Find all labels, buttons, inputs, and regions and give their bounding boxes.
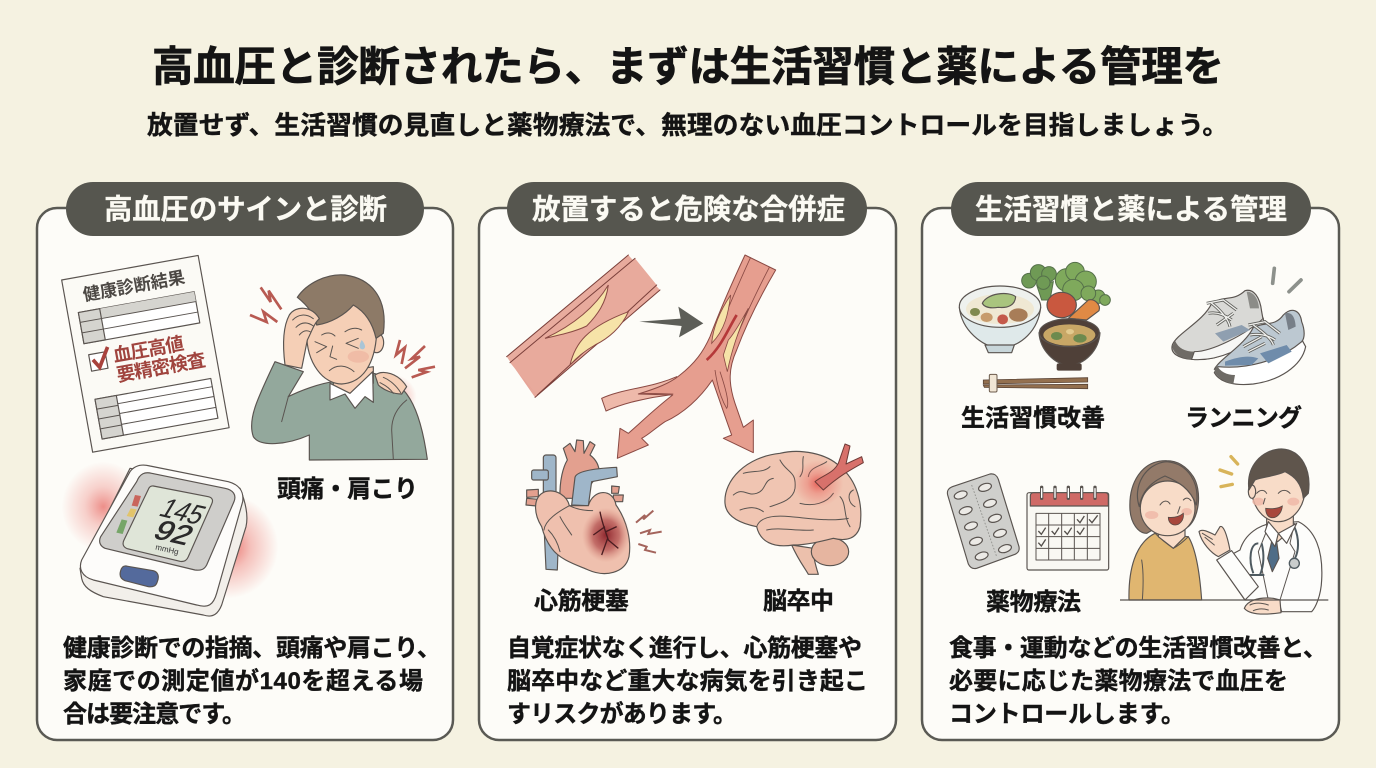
- icon: medication calendar: [1027, 487, 1109, 570]
- icon: blood pressure monitor: 92: [148, 515, 199, 551]
- icon: blocked branching artery with arrows: [602, 255, 776, 458]
- panel heading: complications: 放置すると危険な合併症: [532, 194, 845, 226]
- panel heading: lifestyle and medication: 生活習慣と薬による管理: [975, 194, 1287, 226]
- body text: signs: 合は要注意です。: [63, 701, 246, 728]
- label: stroke: 脳卒中: [763, 588, 834, 615]
- icon: blood pressure monitor: [62, 462, 278, 616]
- icon: checkup report: 血圧高値: [111, 333, 186, 366]
- icon: medication blister pack: [947, 474, 1019, 569]
- icon: checkup report: [62, 255, 229, 452]
- body text: complications: すリスクがあります。: [507, 700, 737, 728]
- icon: checkup report: 健康診断結果: [81, 267, 186, 305]
- icon: man with headache and stiff shoulder: [250, 275, 435, 460]
- panel: complications: [479, 182, 896, 740]
- body text: management: コントロールします。: [949, 701, 1185, 728]
- icon: narrowed artery: [507, 255, 660, 397]
- label: medication therapy: 薬物療法: [986, 589, 1081, 616]
- icon: heart with infarction: [526, 440, 662, 574]
- body text: management: 必要に応じた薬物療法で血圧を: [949, 668, 1288, 695]
- panel heading: lifestyle and medication: [951, 182, 1311, 236]
- title: 高血圧と診断されたら、まずは生活習慣と薬による管理を: [152, 43, 1224, 90]
- panel: lifestyle and medication: [922, 182, 1339, 740]
- label: headache and stiff shoulders: 頭痛・肩こり: [277, 476, 418, 503]
- body text: signs: [63, 635, 441, 728]
- icon: blood pressure monitor: mmHg: [155, 543, 179, 557]
- body text: management: 食事・運動などの生活習慣改善と、: [949, 635, 1327, 662]
- label: myocardial infarction: 心筋梗塞: [534, 588, 629, 615]
- icon: brain with stroke: [725, 444, 863, 574]
- panel heading: signs and diagnosis: 高血圧のサインと診断: [104, 194, 387, 226]
- body text: signs: 家庭での測定値が140を超える場: [63, 667, 423, 695]
- icon: blood pressure monitor: 145: [154, 493, 211, 531]
- body text: management: [949, 635, 1327, 728]
- body text: complications: 自覚症状なく進行し、心筋梗塞や: [507, 635, 862, 662]
- icon: healthy meal: [959, 262, 1110, 392]
- arrow: progression: [639, 307, 703, 337]
- icon: checkup report: 要精密検査: [115, 349, 208, 386]
- panel: signs and diagnosis: [37, 182, 453, 740]
- icon: patient and doctor: [1120, 449, 1328, 614]
- label: lifestyle improvement: 生活習慣改善: [961, 405, 1105, 432]
- label: running: ランニング: [1185, 404, 1302, 432]
- panel heading: complications: [507, 182, 867, 236]
- body text: complications: [507, 635, 868, 728]
- body text: complications: 脳卒中など重大な病気を引き起こ: [507, 668, 868, 695]
- body text: signs: 健康診断での指摘、頭痛や肩こり、: [63, 635, 441, 662]
- subtitle: 放置せず、生活習慣の見直しと薬物療法で、無理のない血圧コントロールを目指しましょう。: [147, 111, 1228, 140]
- panel heading: signs and diagnosis: [66, 182, 424, 236]
- icon: running shoes: [1172, 268, 1306, 385]
